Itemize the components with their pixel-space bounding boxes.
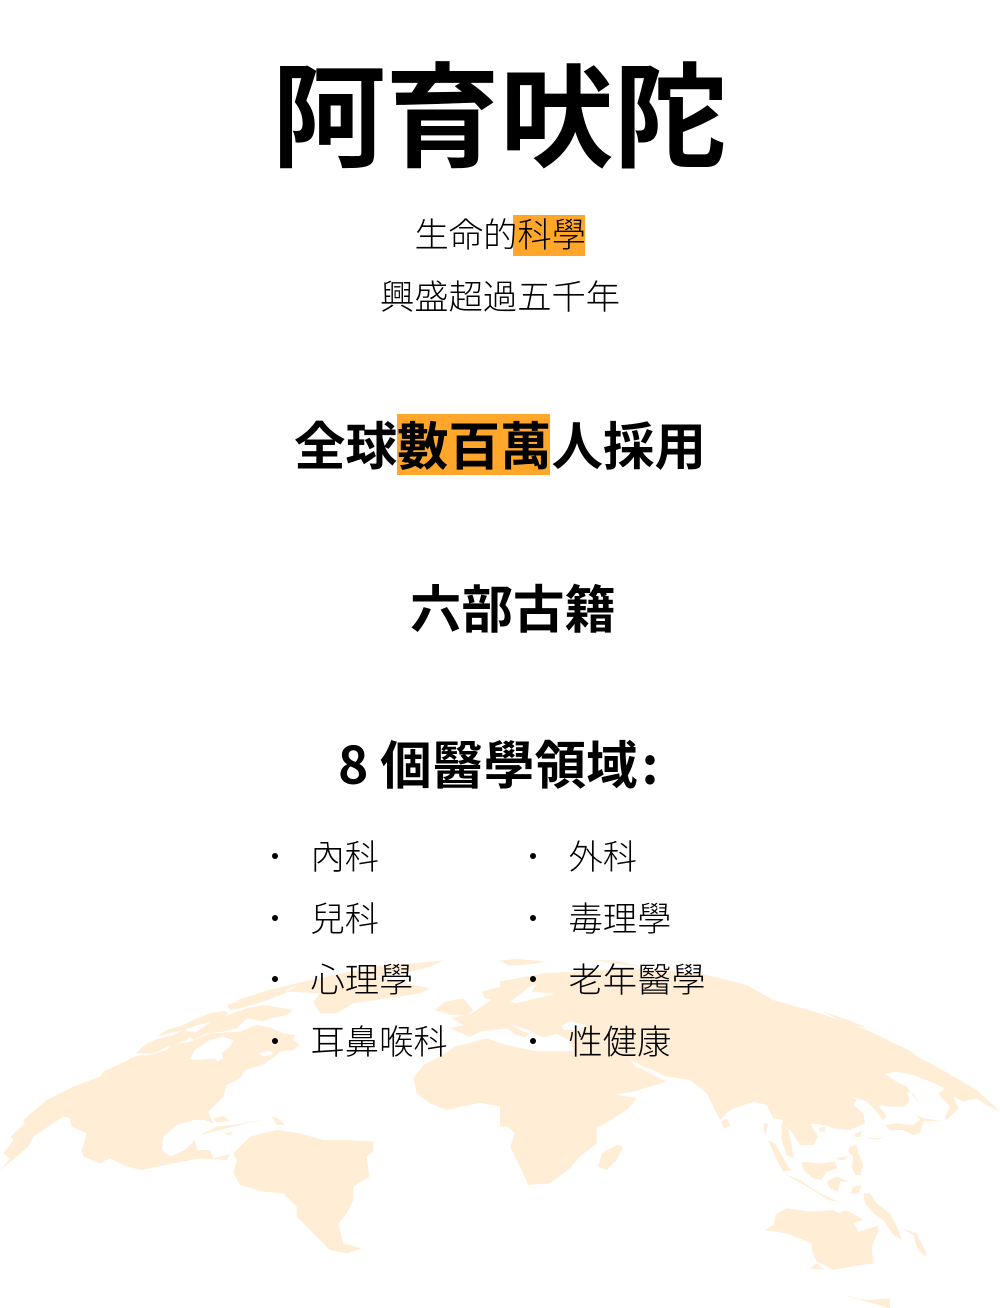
list: right column: 老年醫學 <box>568 952 706 1002</box>
list: left column: 耳鼻喉科 <box>310 1014 448 1064</box>
list: left column: 兒科 <box>310 891 379 941</box>
item <box>272 853 278 859</box>
list: right column <box>530 829 706 1064</box>
list: left column <box>272 829 448 1064</box>
list: left column: 心理學 <box>310 952 413 1002</box>
list: right column: 毒理學 <box>568 891 671 941</box>
list: right column: 外科 <box>568 829 637 879</box>
highlight: science <box>513 215 585 256</box>
list: left column: 內科 <box>310 829 379 879</box>
item <box>530 853 536 859</box>
highlight: millions <box>397 414 550 475</box>
subtitle line 1: 生命的科學 <box>414 207 586 257</box>
heading: eight medical fields: 8 個醫學領域: <box>338 724 658 799</box>
heading: used worldwide: 全球數百萬人採用 <box>294 405 706 480</box>
heading: six classics: 六部古籍 <box>410 568 616 643</box>
subtitle line 2: 興盛超過五千年 <box>380 269 620 319</box>
list: right column: 性健康 <box>568 1014 671 1064</box>
title: 阿育吠陀 <box>272 26 727 191</box>
